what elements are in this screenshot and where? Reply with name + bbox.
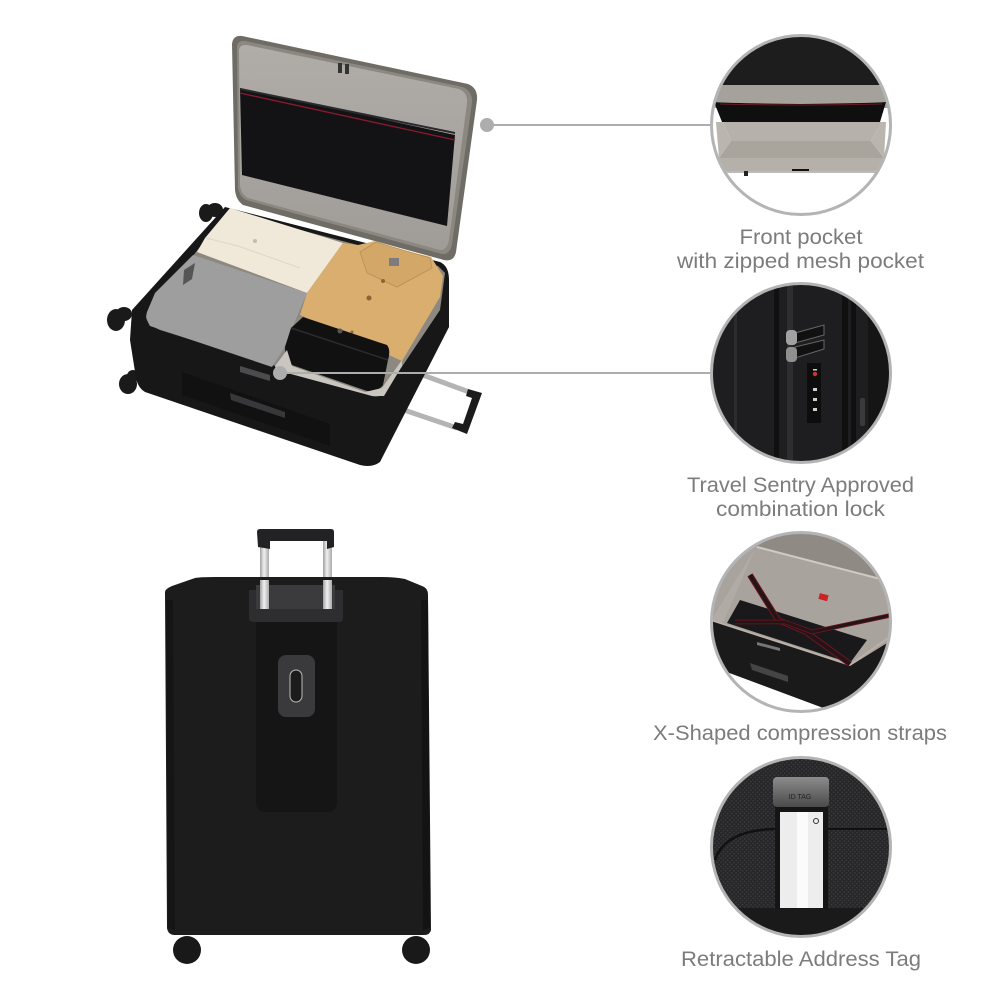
grey sweater — [146, 255, 307, 367]
detail circle: compression straps — [708, 531, 892, 722]
red label — [818, 593, 829, 601]
front handle — [230, 393, 285, 418]
handle recess — [249, 590, 343, 622]
detail circle: address tag: ID TAG — [789, 794, 811, 801]
back view suitcase — [165, 529, 431, 964]
lid lining — [237, 41, 472, 254]
side shading — [166, 600, 175, 930]
tag slot — [775, 806, 828, 909]
front handle — [750, 663, 788, 682]
metal zip sliders — [786, 330, 797, 345]
grip plate — [278, 655, 315, 717]
detail circle: combination lock — [710, 283, 892, 465]
interior lining rim — [146, 211, 445, 396]
detail circle: address tag — [710, 756, 892, 938]
suitcase base — [130, 207, 449, 466]
open suitcase with packed clothes — [107, 36, 482, 466]
toiletry pouch — [285, 317, 389, 391]
tan shirt — [300, 241, 443, 361]
mesh pocket — [240, 88, 455, 226]
pocket zip tape — [240, 89, 455, 133]
telescopic handle — [404, 374, 482, 434]
lid zipper pulls — [338, 63, 349, 74]
callout line and dot: lock — [273, 366, 711, 380]
white tag — [780, 812, 823, 908]
callout line and dot: front pocket — [480, 118, 711, 132]
side tab — [860, 398, 865, 426]
shirt label — [389, 258, 399, 266]
brand plate — [240, 366, 270, 381]
caption: compression straps: X-Shaped compression straps — [653, 721, 947, 745]
X straps — [750, 575, 850, 664]
back panel — [256, 622, 337, 812]
caption: front pocket — [676, 225, 924, 273]
suitcase wheels — [107, 203, 223, 394]
white corner outside case — [729, 672, 822, 710]
lid outer shell — [232, 36, 477, 260]
caption: combination lock — [687, 473, 914, 521]
wheels — [173, 936, 430, 964]
caption: front pocket: Front pocket — [740, 225, 863, 249]
caption: combination lock: combination lock — [716, 497, 885, 521]
lock dials — [807, 363, 821, 423]
shirt buttons — [350, 279, 385, 334]
mesh panel — [727, 600, 867, 663]
tag cap — [773, 777, 829, 807]
cream folded shirt — [197, 208, 343, 293]
caption: combination lock: Travel Sentry Approved — [687, 473, 914, 497]
caption: front pocket: with zipped mesh pocket — [676, 249, 924, 273]
light lining corner — [275, 350, 402, 396]
caption: address tag: Retractable Address Tag — [681, 947, 921, 971]
zip pull straps — [795, 325, 824, 343]
detail circle: front pocket — [710, 34, 892, 216]
tan shirt collar — [360, 242, 432, 287]
pull handle — [257, 529, 334, 610]
grip button — [290, 670, 302, 702]
suitcase body — [165, 577, 431, 935]
red zip trim — [240, 93, 455, 140]
